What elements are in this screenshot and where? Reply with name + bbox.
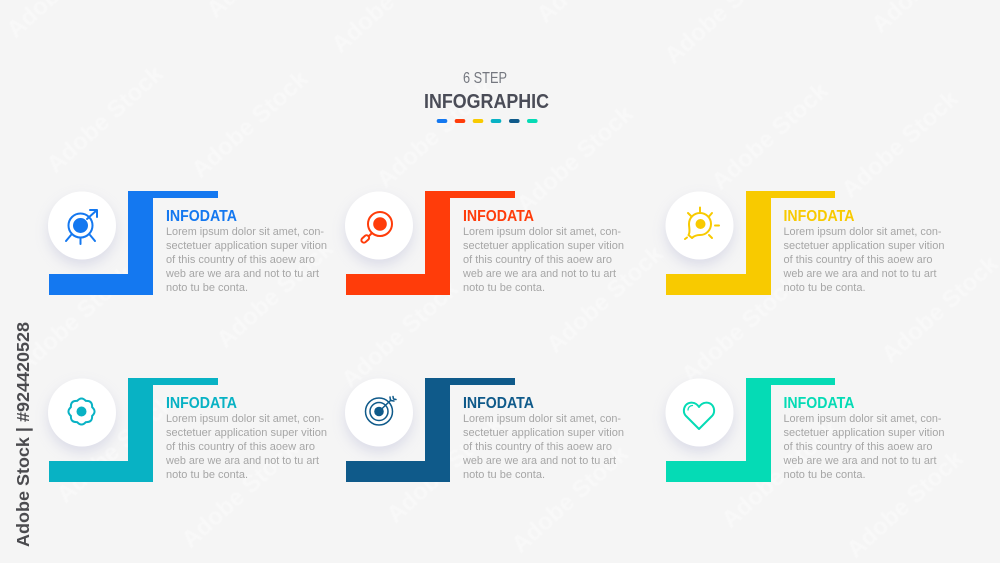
bracket shape [346,191,515,295]
icon circle [48,378,116,446]
icon: heart [684,403,714,429]
bracket shape [666,191,835,295]
body text: noto tu be conta. [166,282,248,294]
heading: INFODATA [784,208,854,225]
stock watermarks: Adobe Stock [186,65,314,184]
heading: INFODATA [784,395,854,412]
body text: of this country of this aoew aro [784,441,932,453]
body text: of this country of this aoew aro [463,441,612,453]
subtitle: 6 STEP [463,70,507,87]
body text: of this country of this aoew aro [463,254,612,266]
body text [165,226,327,294]
stock watermarks: Adobe Stock [676,270,804,389]
body text: sectetuer application super vition [784,240,944,252]
colour dashes [437,119,538,123]
bracket shape [49,378,218,482]
bracket shape [666,378,835,482]
heading: INFODATA [463,208,534,225]
heading: INFOGRAPHIC [424,90,549,113]
stock watermarks: Adobe Stock [876,250,1000,369]
body text: web are we ara and not to tu art [462,455,616,467]
icon circle [345,192,413,260]
body text: sectetuer application super vition [166,427,327,439]
body text: noto tu be conta. [166,469,248,481]
body text: sectetuer application super vition [166,240,327,252]
icon circle [666,378,734,446]
body text: Lorem ipsum dolor sit amet, con- [166,413,324,425]
body text: web are we ara and not to tu art [783,455,936,467]
bracket shape [346,378,515,482]
body text [165,413,327,481]
stock watermarks: Adobe Stock [836,85,964,204]
heading: INFODATA [463,395,534,412]
panel: step 2 red [345,191,624,295]
panel: step 3 yellow [666,191,944,295]
body text: Lorem ipsum dolor sit amet, con- [784,226,942,238]
body text: web are we ara and not to tu art [165,455,319,467]
stock watermarks: Adobe Stock [11,260,139,379]
panel: step 4 teal [48,378,327,482]
icon circle [345,378,413,446]
stock id label: Adobe Stock | #924420528 [13,322,33,547]
icon: bullseye with arrow [366,396,396,425]
body text: web are we ara and not to tu art [462,268,616,280]
body text [783,226,944,294]
icon: light bulb [685,208,719,239]
body text: Lorem ipsum dolor sit amet, con- [463,226,621,238]
panel: step 6 mint [666,378,944,482]
body text [462,413,624,481]
body text: Lorem ipsum dolor sit amet, con- [463,413,621,425]
body text [462,226,624,294]
stock watermarks: Adobe Stock [41,60,169,179]
body text: Lorem ipsum dolor sit amet, con- [784,413,942,425]
body text [783,413,944,481]
stock watermarks: Adobe Stock [371,75,499,194]
body text: web are we ara and not to tu art [165,268,319,280]
body text: of this country of this aoew aro [166,254,315,266]
body text: noto tu be conta. [463,469,545,481]
stock watermarks: Adobe Stock [176,435,304,554]
stock watermarks: Adobe Stock [706,77,834,196]
stock watermarks: Adobe Stock [381,410,509,529]
stock watermarks: Adobe Stock [541,240,669,359]
body text: Lorem ipsum dolor sit amet, con- [166,226,324,238]
body text: of this country of this aoew aro [166,441,315,453]
body text: sectetuer application super vition [784,427,944,439]
stock watermarks: Adobe Stock [506,440,634,559]
body text: sectetuer application super vition [463,240,624,252]
icon: magnifier [360,212,392,244]
icon circle [48,192,116,260]
icon: gear flower [68,398,95,425]
heading: INFODATA [166,208,237,225]
panel: step 1 blue [48,191,327,295]
title block [424,70,549,123]
stock watermarks: Adobe Stock [51,390,179,509]
stock watermarks: Adobe Stock [211,235,339,354]
stock watermarks: Adobe Stock [511,100,639,219]
body text: noto tu be conta. [784,282,866,294]
panel: step 5 navy [345,378,624,482]
stock watermarks: Adobe Stock [841,445,969,563]
icon: target with arrow [66,210,97,244]
heading: INFODATA [166,395,237,412]
stock watermarks: Adobe Stock [716,415,844,534]
body text: noto tu be conta. [784,469,866,481]
bracket shape [49,191,218,295]
body text: noto tu be conta. [463,282,545,294]
body text: sectetuer application super vition [463,427,624,439]
stock watermarks: Adobe Stock [336,275,464,394]
icon circle [666,192,734,260]
body text: of this country of this aoew aro [784,254,932,266]
body text: web are we ara and not to tu art [783,268,936,280]
